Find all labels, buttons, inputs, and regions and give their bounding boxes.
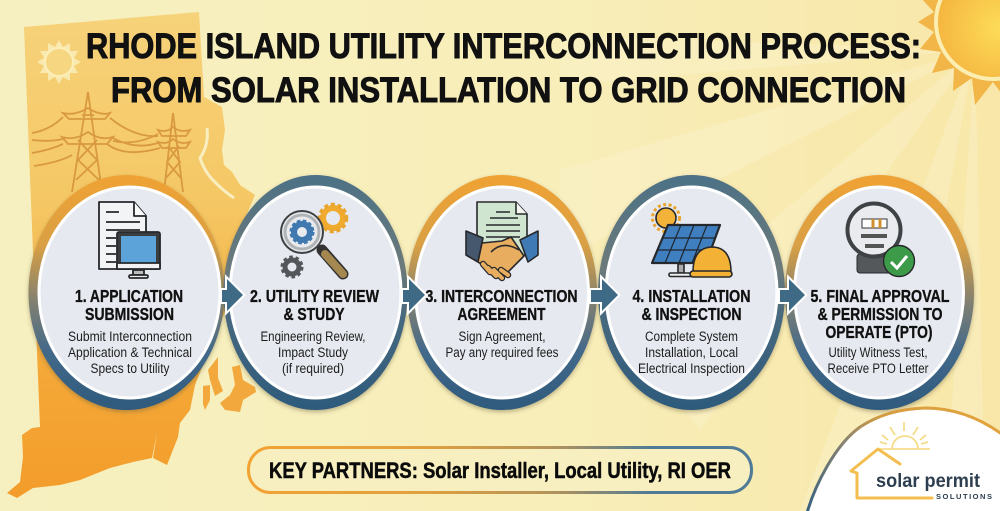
panel: step 3 interconnection agreement [407, 175, 597, 410]
icon: solar panel and hard hat [652, 204, 732, 277]
panel: step 2 utility review and study [224, 175, 408, 410]
panel: step 4 installation and inspection [598, 175, 785, 410]
text: step 1 description: Specs to Utility [90, 361, 170, 376]
icon: agreement handshake [466, 202, 538, 278]
heading: step 1: SUBMISSION [85, 304, 174, 324]
arrows between steps [222, 279, 805, 311]
heading: step 4: 4. INSTALLATION [632, 286, 750, 306]
heading: step 3: AGREEMENT [458, 304, 546, 324]
icon: logo house [851, 449, 932, 498]
icon: electric meter with check [848, 204, 914, 276]
text: logo tagline: SOLUTIONS [936, 492, 992, 501]
logo: solar permit solutions [807, 408, 1000, 511]
callout: key partners [248, 448, 752, 492]
panel: step 5 final approval and PTO [785, 175, 974, 410]
text: step 2 description: Impact Study [278, 345, 348, 360]
text: step 5 description: Utility Witness Test, [828, 345, 928, 360]
panel: step 1 application submission [28, 175, 224, 410]
text: step 5 description: Receive PTO Letter [828, 361, 929, 376]
heading: step 2: & STUDY [284, 304, 345, 324]
title: FROM SOLAR INSTALLATION TO GRID CONNECTION [111, 70, 906, 110]
text: step 1 description: Application & Technical [68, 345, 192, 360]
icon: small sun on map [37, 40, 81, 84]
text: step 2 description: (if required) [282, 361, 344, 376]
heading: step 2: 2. UTILITY REVIEW [250, 286, 379, 306]
icon: logo sun [880, 422, 930, 449]
text: step 4 description: Electrical Inspection [638, 361, 745, 376]
text: step 2 description: Engineering Review, [260, 329, 366, 344]
map: Rhode Island state [7, 12, 256, 498]
text: step 4 description: Installation, Local [645, 345, 738, 360]
text: step 1 description: Submit Interconnection [68, 329, 192, 344]
heading: step 1: 1. APPLICATION [75, 286, 183, 306]
text: step 3 description: Sign Agreement, [458, 329, 546, 344]
heading: step 5: & PERMISSION TO [818, 304, 942, 324]
heading: step 4: & INSPECTION [642, 304, 742, 324]
heading: step 5: OPERATE (PTO) [826, 322, 932, 342]
icon: magnifier and gears [281, 204, 346, 277]
text: step 4 description: Complete System [645, 329, 738, 344]
icon: large sun [918, 0, 1000, 105]
text: logo wordmark: solar permit [876, 470, 980, 492]
text: step 3 description: Pay any required fees [446, 345, 559, 360]
callout: key partners: KEY PARTNERS: Solar Installer, Local Utility, RI OER [269, 458, 731, 483]
sun rays [560, 35, 985, 511]
heading: step 5: 5. FINAL APPROVAL [810, 286, 950, 306]
icon: document and computer [99, 202, 160, 278]
title [86, 26, 921, 110]
icon: transmission towers [32, 92, 190, 192]
heading: step 3: 3. INTERCONNECTION [426, 286, 578, 306]
